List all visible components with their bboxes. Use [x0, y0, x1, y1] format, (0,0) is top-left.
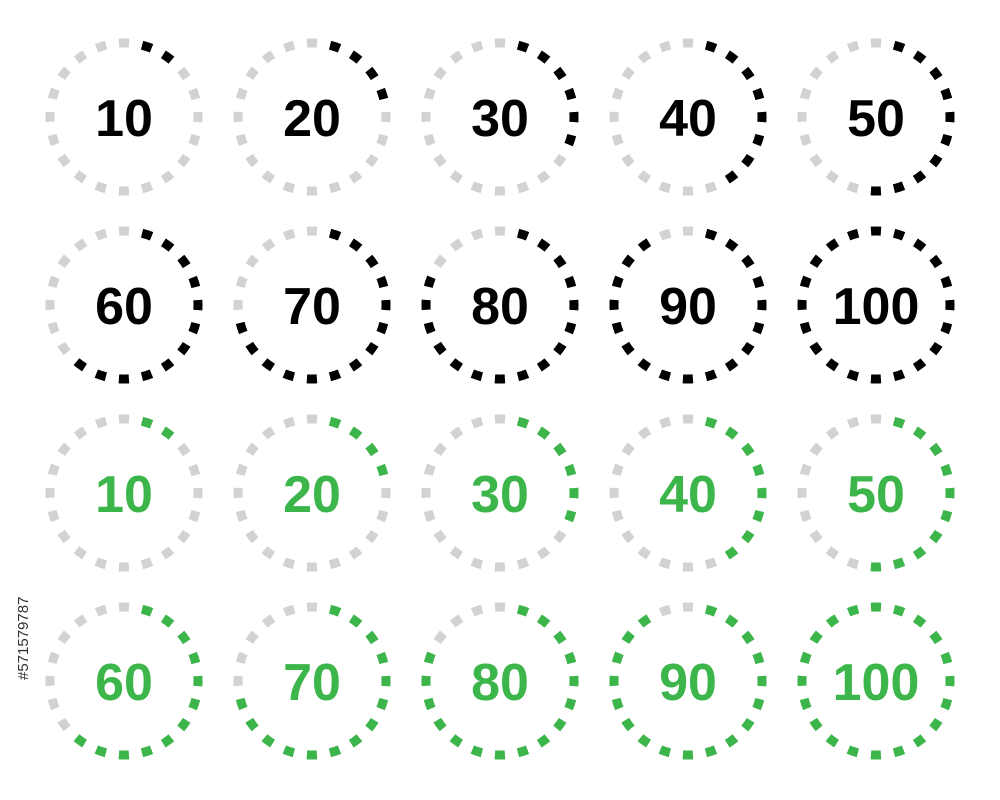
watermark id text: #571579787 [15, 597, 32, 680]
dial: black 10 [45, 38, 203, 196]
dial: green 60 [45, 602, 203, 760]
dial: black 80 [421, 226, 579, 384]
dial: black 50 [797, 38, 955, 196]
dial: black 50: 50 [847, 90, 905, 148]
dial: green 10 [45, 414, 203, 572]
dial: black 90 [609, 226, 767, 384]
dial: black 70 [233, 226, 391, 384]
dial: green 30 [421, 414, 579, 572]
dial: black 20 [233, 38, 391, 196]
dial: green 70 [233, 602, 391, 760]
dial: green 100 [797, 602, 955, 760]
dial: black 40 [609, 38, 767, 196]
dial: green 30: 30 [471, 466, 529, 524]
dial: green 80 [421, 602, 579, 760]
dial: green 90 [609, 602, 767, 760]
dial: green 100: 100 [833, 654, 919, 712]
dial: green 60: 60 [95, 654, 153, 712]
dial: black 100 [797, 226, 955, 384]
dial: green 40: 40 [659, 466, 717, 524]
dial: black 10: 10 [95, 90, 153, 148]
dial: black 60: 60 [95, 278, 153, 336]
dial: green 10: 10 [95, 466, 153, 524]
dial: green 20: 20 [283, 466, 341, 524]
dial: black 70: 70 [283, 278, 341, 336]
dial: green 20 [233, 414, 391, 572]
dial: black 90: 90 [659, 278, 717, 336]
dial: black 30 [421, 38, 579, 196]
dial: green 50 [797, 414, 955, 572]
dial: green 50: 50 [847, 466, 905, 524]
dial: black 30: 30 [471, 90, 529, 148]
dial: green 90: 90 [659, 654, 717, 712]
dial: green 40 [609, 414, 767, 572]
dial: black 20: 20 [283, 90, 341, 148]
dial: black 100: 100 [833, 278, 919, 336]
dial: black 80: 80 [471, 278, 529, 336]
dial: green 80: 80 [471, 654, 529, 712]
dial: black 40: 40 [659, 90, 717, 148]
dial: black 60 [45, 226, 203, 384]
dial: green 70: 70 [283, 654, 341, 712]
